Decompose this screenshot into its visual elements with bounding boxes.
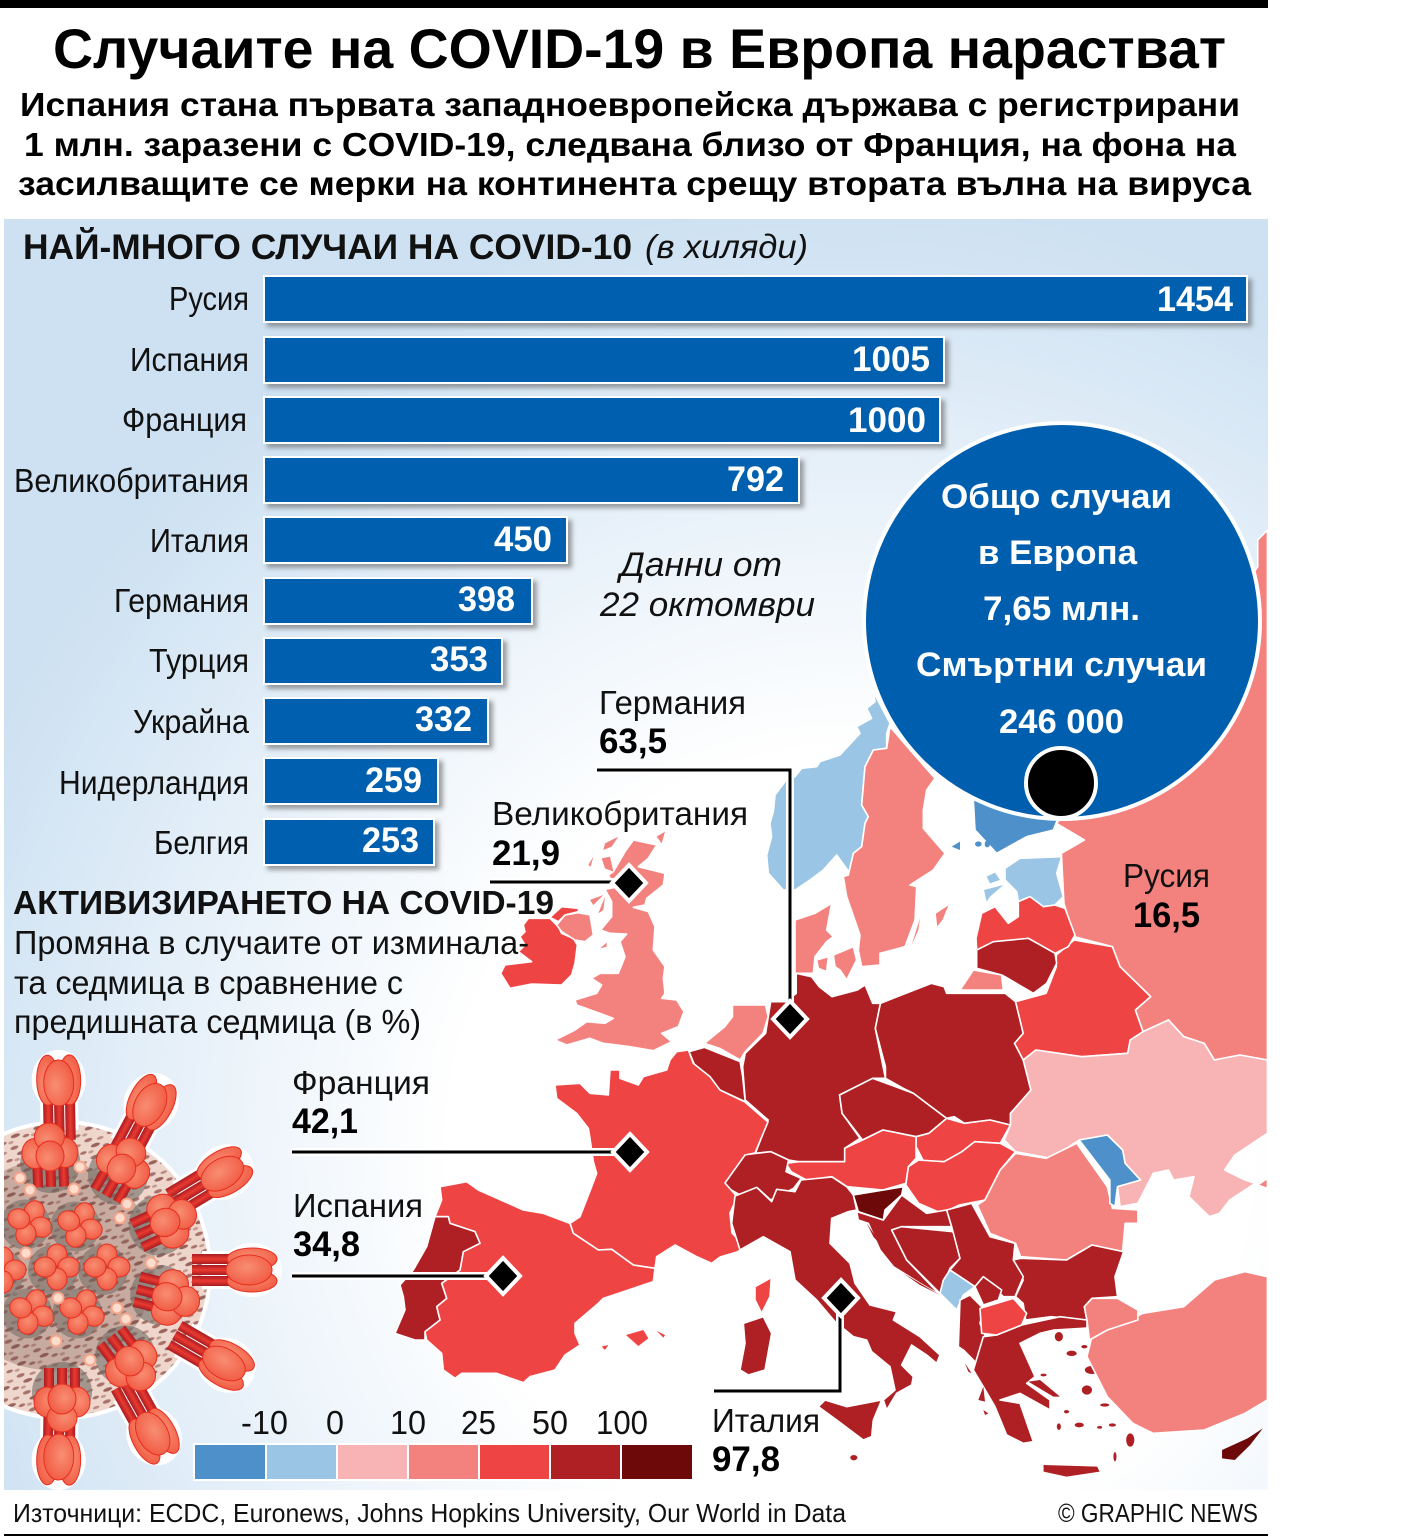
islands: Denmark [818,958,828,970]
bar: Belgium: 253 [362,821,419,860]
country: Spain [425,1182,655,1383]
bar: Netherlands: Нидерландия [59,764,249,801]
subtitle: 1 млн. заразени с COVID-19, следвана близо от Франция, на фона на [24,126,1237,163]
country: Turkey in Europe [1084,1298,1138,1340]
bar: France: 1000 [848,401,926,440]
callout: total cases circle: 246 000 [999,703,1124,741]
virus spikes outer [31,1050,282,1490]
country: Estonia [1005,857,1063,907]
islands: Aegean [850,1332,1134,1461]
callout: total cases circle: 7,65 млн. [983,590,1140,628]
country: North Macedonia [980,1298,1027,1335]
callout: Germany [597,684,807,1037]
heading: activation: та седмица в сравнение с [14,964,403,1001]
callout: United Kingdom: 21,9 [492,834,560,873]
country: Turkey [1087,1272,1267,1433]
heading: most cases: (в хиляди) [645,228,808,265]
callout: total cases circle: Смъртни случаи [916,646,1207,684]
virus illustration [0,1050,282,1490]
map of Europe [395,530,1267,1477]
data date note: Данни от [616,546,782,584]
country: France [555,1050,768,1268]
bar: Russia: Русия [169,280,249,317]
virus dots [14,1162,156,1366]
bar: France [122,397,940,443]
country: Greece [973,1317,1087,1443]
bar: Turkey: 353 [430,640,488,679]
island: Gotland [936,906,948,926]
country: Northern Ireland [557,913,593,942]
island: Corsica [755,1273,772,1313]
country: Russia Caucasus [1260,1180,1267,1188]
bar: United Kingdom: Великобритания [14,462,249,499]
country: Bosnia [892,1227,960,1293]
bar: Turkey: Турция [149,642,249,679]
bar: Netherlands [59,758,438,804]
Ireland: Donegal [551,908,578,921]
virus body shading [0,1160,155,1370]
callout: total cases circle [864,423,1260,819]
country: Ukraine [1004,1020,1267,1217]
bar: Belgium [154,819,434,865]
islands: Ionian and Euboea [965,1363,1060,1415]
bar: Ukraine [133,698,488,744]
bar: Russia: 1454 [1157,280,1234,319]
heading: most cases: НАЙ-МНОГО СЛУЧАИ НА COVID-10 [23,227,632,267]
country: Sweden [843,727,945,967]
islands: Dalmatian [867,1223,940,1295]
subtitle: Испания стана първата западноевропейска държава с регистрирани [20,86,1240,123]
island: Crete [1044,1465,1100,1477]
country: Kaliningrad [962,970,1002,990]
callout: France: Франция [292,1064,430,1101]
callout: United Kingdom [490,795,748,901]
island: Sardinia [740,1317,772,1375]
bar: Italy: 450 [494,520,552,559]
bar: United Kingdom: 792 [727,460,784,499]
country: Austria [786,1130,916,1190]
islands: Estonia [984,873,1003,902]
bar: Spain: 1005 [852,340,930,379]
country: Denmark [795,903,833,973]
data date note: 22 октомври [599,586,815,624]
callout: France: 42,1 [292,1102,358,1141]
country: Cyprus [1222,1428,1263,1460]
country: Belarus [1014,940,1151,1060]
island: Sicily [818,1400,882,1440]
callout: total cases circle: в Европа [978,534,1138,572]
icon: black circle [1026,748,1096,818]
legend: 100 [596,1404,648,1441]
virus petals [0,1191,130,1346]
country: Great Britain [555,840,684,1051]
bar: Italy [150,517,567,563]
country: Croatia [857,1195,952,1295]
country: Finland [973,800,1060,853]
callout: France [292,1064,647,1170]
country: Latvia [976,897,1075,953]
country: Switzerland [722,1152,801,1200]
country: Kosovo [975,1277,1002,1305]
sources: Източници: ECDC, Euronews, Johns Hopkins University, Our World in Data [13,1498,847,1528]
country: Albania [958,1295,988,1363]
island: Oland [912,918,920,945]
virus body [0,1122,210,1418]
country: Italy [732,1177,940,1410]
bar: Spain [130,337,944,383]
country: Portugal [395,1217,480,1340]
bar: United Kingdom [14,457,799,503]
country: Ireland [501,918,577,988]
country: Germany [743,973,885,1162]
callout: Germany: 63,5 [599,722,667,761]
panel background [4,219,1268,1490]
country: Hungary [906,1142,1016,1213]
country: Serbia [947,1203,1023,1297]
callout: Italy: Италия [712,1402,820,1439]
data date note [599,546,815,624]
callout: United Kingdom: Великобритания [492,795,748,832]
legend: -10 [241,1404,288,1441]
legend: 25 [461,1404,496,1441]
country: Poland [875,983,1031,1125]
callout: Italy [712,1280,858,1479]
top black bar [0,0,1268,8]
bar: Germany: Германия [114,582,249,619]
country: Slovakia [916,1118,1010,1162]
country: Lithuania [977,938,1057,993]
label: Russia: 16,5 [1133,896,1200,935]
island: Zealand [833,947,857,980]
heading: activation [13,884,554,1040]
bar: Germany: 398 [458,580,515,619]
callout: Spain: 34,8 [293,1225,360,1264]
bar: France: Франция [122,401,247,438]
bar: Spain: Испания [130,341,249,378]
country: Netherlands [704,1005,768,1060]
subtitle [18,86,1252,202]
callout: Germany: Германия [599,684,746,721]
legend: 50 [532,1404,568,1441]
country: Russia [1056,530,1267,1060]
bar: Ukraine: Украйна [133,703,250,740]
country: Slovenia [853,1187,903,1220]
bar: Belgium: Белгия [154,824,249,861]
islands: Balearic [602,1330,665,1350]
bar: Germany [114,578,532,624]
label: Russia [1123,857,1210,935]
label: Russia: Русия [1123,857,1210,894]
callout: Spain: Испания [293,1187,423,1224]
callout: total cases circle: Общо случаи [941,478,1172,516]
heading: activation: АКТИВИЗИРАНЕТО НА COVID-19 [13,884,554,921]
callout: Italy: 97,8 [712,1440,780,1479]
bar: Russia [169,276,1247,322]
country: Czechia [840,1078,947,1140]
bar chart [14,276,1247,865]
country: Montenegro [940,1270,975,1310]
legend [194,1404,693,1480]
country: Bulgaria [1013,1245,1124,1320]
islands: Hebrides [588,832,665,948]
heading: activation: предишната седмица (в %) [14,1003,421,1040]
country: Romania [977,1143,1138,1260]
callout: Spain [292,1187,520,1294]
title: Случаите на COVID-19 в Европа нарастват [53,17,1226,80]
credit: © GRAPHIC NEWS [1058,1498,1258,1528]
bar: Italy: Италия [150,522,249,559]
virus inner spikes [19,1122,208,1432]
heading: activation: Промяна в случаите от изминала- [14,924,529,961]
legend: 0 [326,1404,344,1441]
country: Belgium [689,1047,745,1102]
bar: Netherlands: 259 [365,761,422,800]
country: Norway [767,692,890,890]
bar: Ukraine: 332 [415,700,472,739]
bar: Turkey [149,638,502,684]
legend: 10 [390,1404,426,1441]
islands: Aland [952,841,990,850]
country: Moldova [1079,1135,1140,1207]
subtitle: засилващите се мерки на континента срещу втората вълна на вируса [18,165,1252,202]
